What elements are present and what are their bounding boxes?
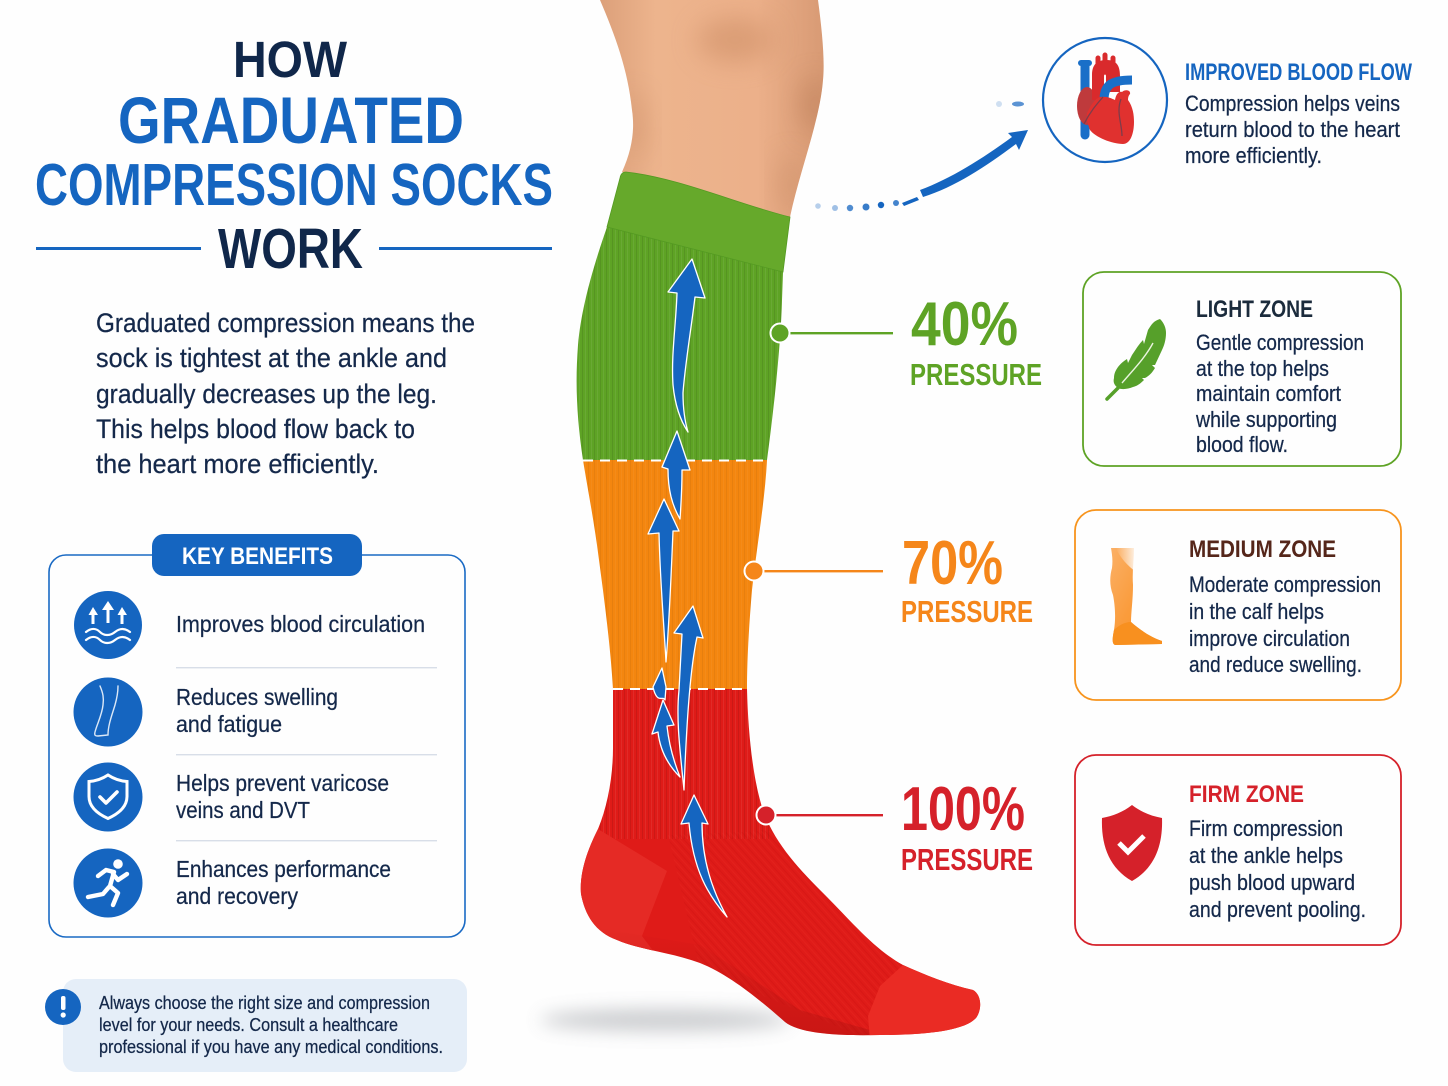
- title: WORK: [218, 217, 363, 281]
- firm zone text: [1189, 781, 1366, 922]
- improved blood flow text: [1185, 59, 1412, 168]
- pulmonary artery: [1104, 80, 1132, 100]
- callout: 100% pressure: [756, 775, 1033, 877]
- callout: 100% pressure: 100%: [901, 775, 1025, 844]
- benefit: swelling: Reduces swelling: [176, 684, 338, 710]
- medium zone text: and reduce swelling.: [1189, 652, 1362, 677]
- improved blood flow text: return blood to the heart: [1185, 117, 1401, 142]
- firm zone text: FIRM ZONE: [1189, 781, 1304, 808]
- left atrium: [1077, 87, 1097, 125]
- arrow: mid orange: [648, 499, 679, 662]
- title: GRADUATED: [118, 83, 464, 157]
- note text: professional if you have any medical conditions.: [99, 1037, 443, 1057]
- title: COMPRESSION SOCKS: [35, 152, 553, 218]
- panel: firm zone: [1075, 755, 1401, 945]
- icon: runner: [74, 848, 142, 918]
- icon: red shield: [1102, 805, 1162, 881]
- light zone text: at the top helps: [1196, 356, 1329, 381]
- panel: medium zone: [1075, 510, 1401, 700]
- medium zone text: in the calf helps: [1189, 599, 1324, 624]
- benefit: swelling: [176, 684, 338, 737]
- benefit: varicose: [176, 770, 389, 823]
- panel: light zone: [1083, 272, 1401, 466]
- medium zone text: Moderate compression: [1189, 572, 1381, 597]
- callout: 100% pressure: PRESSURE: [901, 842, 1033, 877]
- heart body: [1087, 90, 1134, 144]
- medium zone text: [1189, 536, 1381, 677]
- intro paragraph: sock is tightest at the ankle and: [96, 343, 447, 373]
- benefit: varicose: veins and DVT: [176, 797, 310, 823]
- arrow: foot: [681, 795, 727, 917]
- medium zone text: MEDIUM ZONE: [1189, 536, 1336, 563]
- intro paragraph: gradually decreases up the leg.: [96, 379, 437, 409]
- title: [35, 31, 553, 281]
- arrow: flow toward heart: [815, 101, 1028, 211]
- firm zone text: at the ankle helps: [1189, 843, 1343, 868]
- callout: 70% pressure: [744, 529, 1033, 629]
- firm zone text: push blood upward: [1189, 870, 1355, 895]
- benefit: performance: Enhances performance: [176, 856, 391, 882]
- icon: leg outline: [74, 678, 142, 746]
- blood flow arrows: [648, 259, 727, 917]
- title: HOW: [233, 31, 348, 88]
- arrow: small upper ankle: [653, 668, 666, 700]
- intro paragraph: This helps blood flow back to: [96, 414, 415, 444]
- intro paragraph: [96, 308, 475, 479]
- heel panel: [580, 829, 667, 950]
- icon: heart in circle: [1043, 38, 1167, 162]
- red zone and foot: [570, 689, 990, 1040]
- badge: key benefits heading: KEY BENEFITS: [182, 543, 333, 570]
- panel: key benefits: [49, 534, 465, 937]
- orange zone: [583, 460, 767, 689]
- arrow: small lower ankle: [652, 700, 680, 777]
- light zone text: while supporting: [1195, 407, 1337, 432]
- leg and graduated sock: [540, 0, 990, 1040]
- light zone text: blood flow.: [1196, 432, 1288, 457]
- callout: 40% pressure: 40%: [911, 290, 1018, 359]
- floor shadow: [540, 1009, 790, 1031]
- benefit: performance: and recovery: [176, 883, 298, 909]
- green cuff: [607, 172, 790, 272]
- callout: 40% pressure: [770, 290, 1042, 392]
- vena cava: [1080, 66, 1090, 135]
- toe panel: [868, 965, 980, 1036]
- icon: exclamation: [45, 989, 81, 1025]
- callout: 70% pressure: PRESSURE: [901, 594, 1033, 629]
- zone dividers: [583, 460, 767, 689]
- green zone: [577, 172, 790, 460]
- note text: Always choose the right size and compression: [99, 993, 430, 1013]
- note text: level for your needs. Consult a healthcare: [99, 1015, 398, 1035]
- aortic arch: [1092, 60, 1120, 100]
- icon: arrows over waves: [74, 591, 142, 659]
- note text: [99, 993, 443, 1057]
- arrow: lower orange: [674, 606, 703, 790]
- medium zone text: improve circulation: [1189, 626, 1350, 651]
- callout: 70% pressure: 70%: [902, 529, 1003, 598]
- improved blood flow text: Compression helps veins: [1185, 91, 1400, 116]
- benefit: circulation: Improves blood circulation: [176, 611, 425, 637]
- icon: shield check: [74, 762, 142, 832]
- arrow: upper orange: [662, 431, 690, 519]
- icon: orange leg: [1110, 548, 1162, 645]
- light zone text: [1195, 296, 1364, 457]
- bare leg: [600, 0, 829, 217]
- light zone text: Gentle compression: [1196, 330, 1364, 355]
- improved blood flow text: more efficiently.: [1185, 143, 1322, 168]
- firm zone text: and prevent pooling.: [1189, 897, 1366, 922]
- intro paragraph: Graduated compression means the: [96, 308, 475, 338]
- benefit: swelling: and fatigue: [176, 711, 282, 737]
- benefit: varicose: Helps prevent varicose: [176, 770, 389, 796]
- benefit: performance: [176, 856, 391, 909]
- intro paragraph: the heart more efficiently.: [96, 449, 379, 479]
- arrow: green zone: [668, 259, 705, 432]
- icon: feather: [1107, 319, 1166, 399]
- light zone text: LIGHT ZONE: [1196, 296, 1313, 323]
- badge: key benefits heading: [152, 534, 362, 576]
- note: consult a healthcare professional: [45, 979, 467, 1072]
- light zone text: maintain comfort: [1196, 381, 1341, 406]
- callout: 40% pressure: PRESSURE: [910, 357, 1042, 392]
- firm zone text: Firm compression: [1189, 816, 1343, 841]
